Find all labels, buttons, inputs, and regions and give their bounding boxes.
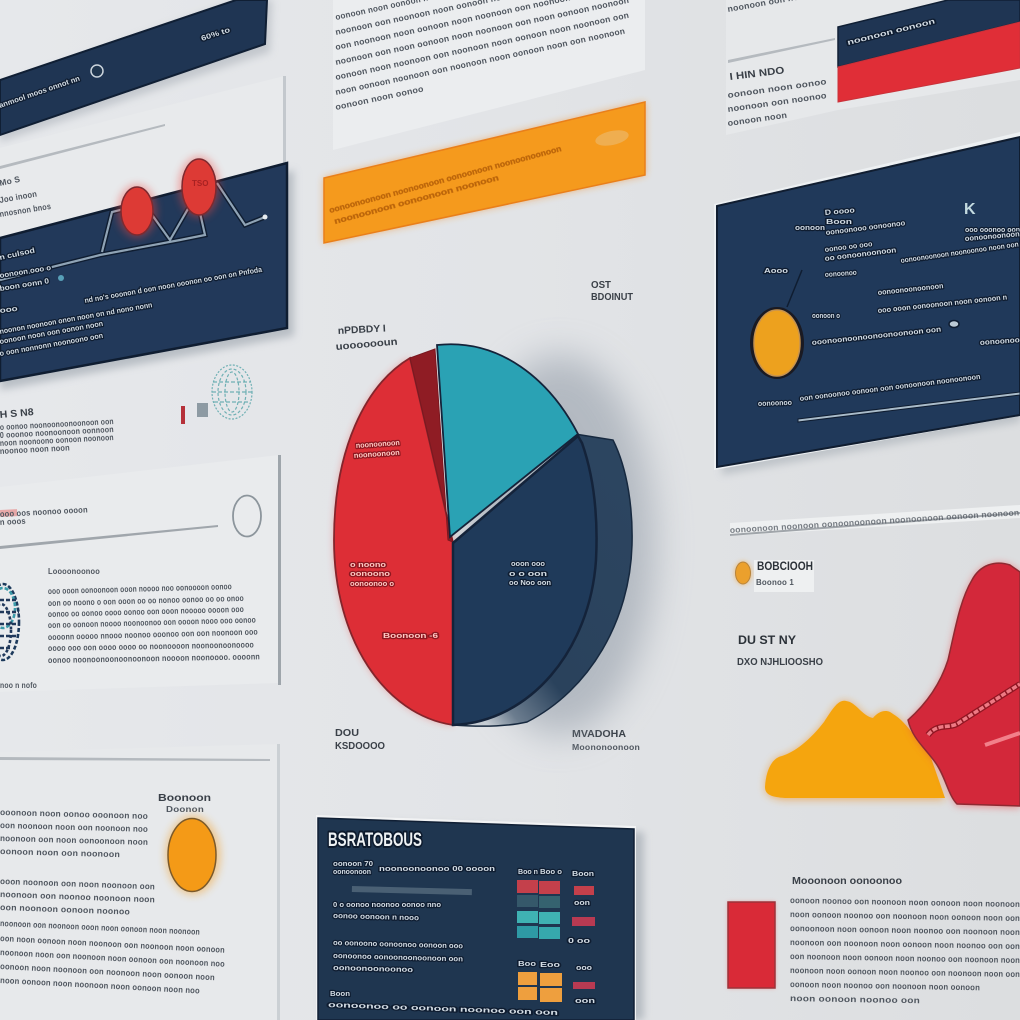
paragraph: oonoo noonoonoonoonoonoon noooon noonoooo. oooonn (48, 651, 260, 665)
upper paragraph: oon noon oonoon noon noonoon oon noonoon noon oonoon (0, 933, 225, 955)
upper paragraph: ooon noonoon oon noon noonoon oon (0, 876, 155, 891)
board notes: oonoon (795, 223, 825, 232)
panel: top-right card (726, 0, 1020, 135)
icon: red marker large: TSO (192, 179, 208, 188)
dark panel captions: nd no's ooonon d oon noon ooonon oo oon on Pnfoda (84, 265, 263, 305)
panel: top centre text card (333, 0, 645, 150)
panel: top centre text card: oonoon noon noonoon oon noonoon noon oonoon noon noonoon oon (334, 10, 630, 82)
board notes: ooonoonoonoonoonoonoon oon (811, 324, 942, 347)
paragraph: oooonn ooooo nnooo noonoo ooonoo oon oon noonoon ooo (48, 627, 258, 642)
labels: pie callouts (335, 280, 640, 752)
panel: top-left banner: 60% to (200, 25, 232, 43)
banner: navy and red block: noonoon oonoon (846, 16, 936, 47)
paragraph: oonoo oo oonoo oooo oonoo oon ooon nooooo oooon ooo (48, 604, 244, 619)
upper paragraph: noonoon oon noonoon ooon noon oonoon noon noonoon (0, 918, 200, 937)
dashboard text rows: oo oonoono oonoonoo oonoon ooo (333, 938, 464, 950)
icon: small orange oval and label: BOBCIOOH (757, 559, 813, 573)
card heading (0, 504, 218, 549)
pie chart: oo Noo oon (509, 578, 551, 587)
callout label: Doonon (166, 804, 204, 814)
banner: orange: noonoonoon oonoonoon noonoon (333, 173, 500, 226)
panel: top-right card: oonoon noon oonoo (727, 76, 827, 100)
pie chart (334, 344, 655, 735)
panel: top-right card: oonoon noon (727, 110, 788, 128)
text block: left small notes (0, 407, 114, 456)
icon: empty ring (233, 496, 261, 536)
pie chart: oonoonoo o (350, 579, 394, 588)
upper paragraph: ooonoon noon oonoo ooonoon noo (0, 807, 148, 821)
side legend: Boon (572, 869, 594, 878)
upper paragraph: noonoon oon noonoo noonoon noon (0, 889, 155, 904)
dashboard text rows: oonoonoonoonoo (333, 963, 414, 974)
callout label: Boonoon (158, 793, 211, 804)
board notes: Aooo (764, 266, 789, 275)
dashboard text rows: oonoon 70 (333, 859, 373, 868)
labels: pie callouts: BDOINUT (591, 292, 633, 303)
dashboard text rows: oonoonoo oo oonoon noonoo oon oon (328, 1000, 559, 1017)
upper paragraph: oonoon noon noonoon oon noonoon noon oonoon noon (0, 961, 215, 982)
card heading: n ooos (0, 516, 26, 527)
text block: left small notes: H S N8 (0, 407, 35, 421)
board notes: ooo ooon oonoonoon noon oonoon n (877, 292, 1008, 315)
dashboard text rows: oonoonoon (333, 867, 371, 876)
colour table: red and teal: Boo n (518, 867, 538, 876)
panel: lower-left card (0, 744, 280, 1020)
panel: top-right card: noonoon oon noonoo (727, 90, 827, 114)
icon: small orange oval and label (734, 559, 814, 592)
dashboard text rows: oonoonoo oonoonoonoonoon oon (333, 951, 464, 963)
side legend: oon (575, 996, 596, 1005)
colour table: orange: Eoo (540, 960, 561, 969)
paragraph (790, 876, 1020, 1005)
chart: orange mountain (765, 701, 945, 800)
paragraph: oon oo oonoon noooo noonoonoo oon oooon nooo ooo oonoo (48, 615, 256, 630)
upper paragraph: oon noonoon oonoon noonoo (0, 902, 130, 917)
upper paragraph: noon oonoon noon noonoon noon oonoon noon noo (0, 975, 200, 995)
panel: top centre text card: noon oonoon noonoon oon noonoon noon oonoon noon oon noonoon (334, 26, 626, 97)
board notes: D oooo (824, 205, 856, 217)
dashboard text rows: oonoo oonoon n nooo (333, 911, 420, 922)
icon: red rectangle (728, 902, 775, 988)
board notes: oonoonoo (980, 335, 1020, 347)
icon: red tick and square (181, 403, 208, 424)
paragraph: noon oonoon noonoo oon (790, 993, 920, 1005)
dark panel captions: oonoon noon oon oonon noon (0, 319, 104, 346)
icon: red marker small (117, 184, 157, 238)
panel: right dark note board (714, 132, 1020, 475)
dark panel captions (0, 246, 263, 358)
panel: left chart card (0, 76, 286, 380)
board notes (758, 201, 1020, 422)
panel: bottom centre dark dashboard (316, 815, 644, 1020)
labels: pie callouts: KSDOOOO (335, 741, 385, 752)
colour table: red and teal (517, 867, 562, 939)
board notes: oonoonoo (758, 398, 792, 408)
text block: left small notes: o oonoo noonoonoonoonoon oon (0, 416, 114, 432)
pie chart: oonoono (350, 569, 391, 578)
text block: chart title (737, 633, 823, 668)
pie slice: red (334, 358, 453, 725)
icon: small orange oval and label: Boonoo 1 (756, 577, 794, 587)
icon: mesh sphere (0, 584, 20, 660)
text block: chart title: DXO NJHLIOOSHO (737, 657, 823, 668)
paragraph: oon oo noono o oon ooon oo oo nonoo oonoo oo oo onoo (48, 593, 244, 608)
text block: left small notes: noon noonoono oonoon noonoon (0, 432, 114, 448)
paragraph: oooo ooo oon oooo oooo oo noonoooon noonoonoonoooo (48, 639, 254, 653)
callout label (158, 793, 211, 814)
paragraph: ooo ooon oonoonoon ooon noooo noo oonoooon oonoo (48, 581, 232, 596)
labels: pie callouts: nPDBDY I (338, 323, 386, 337)
icon: teal globe (212, 365, 252, 419)
side legend (568, 869, 596, 1005)
icon: red marker large (178, 156, 220, 218)
panel: left chart card: nnosnon bnos (0, 201, 52, 219)
card heading: ooo oos noonoo oooon (0, 504, 88, 519)
chart: red mountain (908, 563, 1020, 808)
side legend: 0 oo (568, 936, 591, 945)
pie slice: navy (453, 436, 597, 725)
board notes: Boon (826, 217, 853, 226)
board notes: oonoo oo ooo (824, 239, 873, 254)
upper paragraph: oon noonoon noon oon noonoon noo (0, 820, 148, 834)
text block: chart title: DU ST NY (738, 633, 796, 647)
panel: right chart header: oonoonoon noonoon oonoonoonoon noonoonoon oonoon noonoon (730, 507, 1020, 535)
pie slice: teal (437, 344, 578, 537)
colour table: orange: Boo (518, 959, 536, 968)
labels: pie callouts: DOU (335, 728, 359, 739)
paragraph (48, 566, 260, 665)
pie chart: Boonoon -6 (383, 631, 438, 640)
pie side wall (453, 434, 632, 726)
labels: pie callouts: OST (591, 280, 611, 291)
paragraph: oonoon noon noonoo oon noonoon noon oonoon (790, 979, 980, 992)
labels: pie callouts: MVADOHA (572, 729, 626, 740)
board notes: oonoonoo (825, 268, 857, 279)
colour table: red and teal: Boo o (540, 867, 562, 876)
board notes: oonoon o (812, 311, 840, 320)
panel: top-left banner (0, 0, 272, 142)
board notes: oon oonoonoo oonoon oon oonoonoon noonoonoon (799, 372, 981, 403)
dashboard text rows: Boon (330, 989, 350, 998)
text block: bottom-right card (728, 876, 1020, 1005)
paragraph: Loooonoonoo (48, 566, 100, 576)
pie slice: dark red (410, 349, 453, 542)
paragraph: Mooonoon oonoonoo (792, 876, 902, 887)
pie chart: noonoonoon (356, 438, 400, 450)
dashboard title: BSRATOBOUS (328, 830, 422, 851)
labels: pie callouts: Moononoonoon (572, 742, 640, 752)
board notes: K (964, 201, 976, 218)
icon: orange circle (165, 815, 221, 895)
board notes: oonoonoonoon (964, 229, 1020, 243)
dark panel captions: boon oonn 0 (0, 276, 50, 293)
panel: left dark chart (0, 156, 294, 390)
dark panel captions: o oon nonnonn noonoono oon (0, 331, 104, 358)
banner: navy and red block (838, 0, 1020, 102)
board notes: oo oonoonoonoon (824, 245, 897, 263)
pie chart: ooon ooo (511, 559, 545, 568)
banner: orange: oonoonoonoon noonoonoon oonoonoon noonoonoonoon (328, 144, 562, 215)
upper paragraph (0, 807, 225, 995)
dashboard text rows: noonoonoonoo 00 oooon (379, 864, 496, 873)
board notes: oonoonooo oonoonoo (825, 218, 906, 237)
panel: left middle text card: noo n nofo (0, 680, 37, 690)
panel: top centre text card: oonoon noon oonoo (334, 83, 424, 112)
upper paragraph: noonoon noon oon noonoon noon oonoon oon noonoon noo (0, 947, 225, 969)
line chart (0, 183, 268, 280)
upper paragraph: noonoon oon noon oonoonoon noon (0, 833, 148, 847)
dashboard text rows (328, 859, 559, 1017)
pie chart: noonoonoon (354, 448, 400, 460)
colour table: orange (518, 959, 562, 1002)
dashboard text rows: 0 o oonoo noonoo oonoo nno (333, 900, 441, 909)
text block: left small notes: 0 ooonoo noonoonoon oonnoon (0, 424, 114, 440)
upper paragraph: oonoon noon oon noonoon (0, 846, 120, 859)
labels: pie callouts: uooooooun (335, 337, 398, 353)
panel: left middle text card (0, 455, 281, 692)
pie chart: o o oon (509, 569, 548, 578)
pie chart: o noono (350, 560, 387, 569)
banner: orange (324, 102, 645, 243)
text block: left small notes: noonoo noon noon (0, 442, 70, 456)
board notes: oonoonoonoonoon (877, 281, 944, 297)
side legend: oon (574, 898, 590, 907)
side legend: ooo (576, 963, 592, 972)
dark panel captions: noonon noonoon onon noon on nd nono nonn (0, 300, 153, 336)
dark panel captions: oonoon ooo o (0, 263, 52, 280)
icon: orange node (750, 270, 804, 379)
panel: top-left banner: anmool moos onnot nn (0, 74, 81, 110)
panel: top-right card: I HIN NDO (729, 65, 785, 83)
